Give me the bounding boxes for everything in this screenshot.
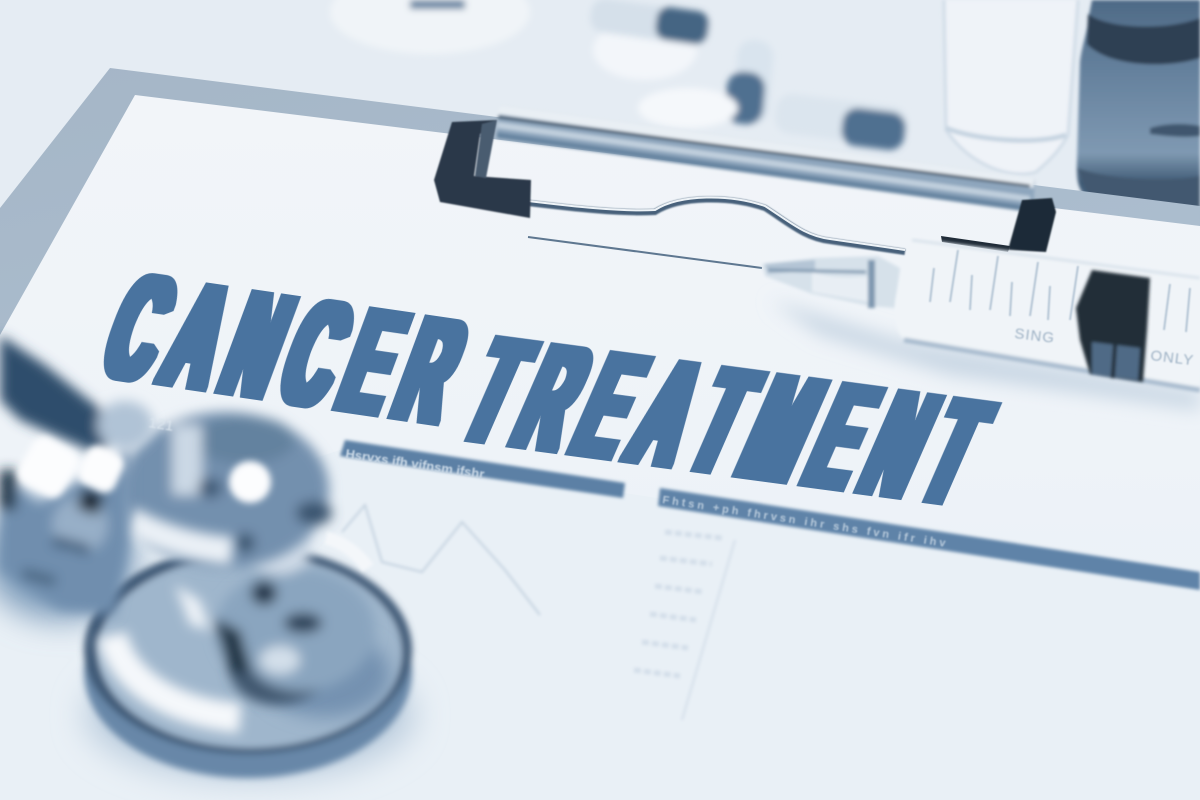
blurred pills in background bbox=[330, 0, 909, 152]
faint axis chart bbox=[634, 532, 735, 720]
head glare bbox=[229, 461, 271, 503]
upper head bbox=[121, 412, 332, 568]
syringe bbox=[528, 237, 1200, 392]
ring lower right shade bbox=[260, 633, 390, 717]
glass vial bbox=[944, 0, 1078, 174]
report section bands bbox=[340, 440, 1200, 590]
rim highlight bbox=[326, 538, 368, 568]
dark plunger bbox=[1076, 270, 1150, 382]
barrel print: SING bbox=[1014, 325, 1056, 347]
barrel bbox=[895, 238, 1200, 392]
clip right dark clasp bbox=[1008, 198, 1056, 252]
clip spring wire bbox=[528, 199, 905, 252]
clipboard clip bbox=[434, 105, 1056, 252]
syringe shadow bbox=[770, 300, 1200, 410]
ring left white highlight bbox=[112, 635, 240, 718]
report section bands: Fhtsn +ph fhrvsn ihr shs fvn ifr ihv bbox=[662, 494, 949, 550]
head lower white band bbox=[128, 520, 232, 551]
band captions: Hsrvxs ifh vifnsm ifshr bbox=[345, 446, 485, 482]
left tubing mass bbox=[0, 335, 153, 615]
chest ring bbox=[84, 546, 412, 778]
needle bbox=[528, 237, 762, 268]
stethoscope bbox=[0, 335, 415, 780]
needle hub bbox=[762, 256, 900, 308]
title: CANCER TREATMENT: CANCER bbox=[87, 244, 483, 454]
syringe: ONLY bbox=[1150, 347, 1195, 369]
clip metal bar bbox=[497, 105, 1035, 212]
barrel graduations bbox=[930, 250, 1190, 332]
blurred left mass shadow bbox=[0, 500, 415, 780]
blurred number on sheet: 121 bbox=[147, 414, 175, 435]
faint line chart bbox=[342, 505, 540, 615]
clipboard board bbox=[0, 68, 1200, 335]
title: CANCER TREATMENT: TREATMENT bbox=[442, 307, 1010, 535]
lower sheet tone bbox=[0, 450, 1200, 800]
chrome highlights bbox=[13, 432, 128, 502]
dark medicine bottle bbox=[1077, 0, 1200, 212]
clip left dark clasp bbox=[434, 120, 531, 218]
title: CANCER TREATMENT bbox=[87, 244, 1010, 535]
chest piece centre bbox=[175, 522, 375, 704]
